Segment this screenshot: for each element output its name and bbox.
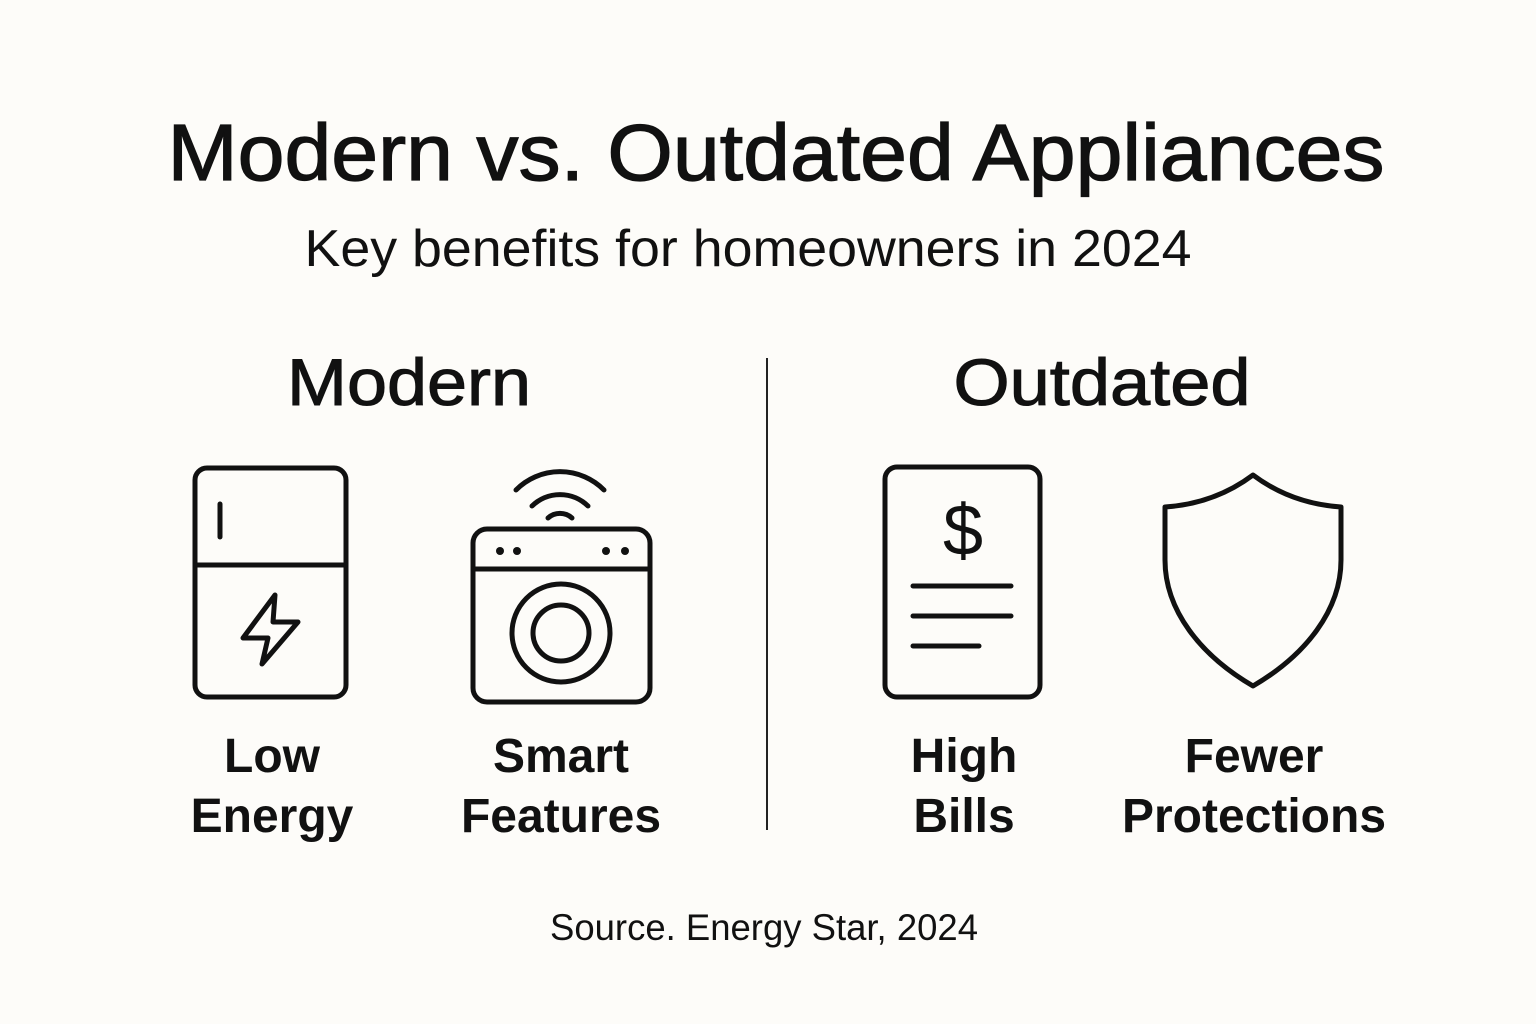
label: Smart Features: Features <box>461 790 661 843</box>
label: Low Energy: Low <box>224 730 321 783</box>
label: Smart Features: Smart <box>493 730 629 783</box>
label: Fewer Protections <box>1122 730 1386 843</box>
icon: smart washer <box>473 472 650 702</box>
label: High Bills: High <box>911 730 1017 783</box>
icon: bill: $ <box>943 491 983 571</box>
icon: fridge with lightning <box>195 468 346 697</box>
label: Low Energy <box>191 730 354 843</box>
label: Smart Features <box>461 730 661 843</box>
title: Modern vs. Outdated Appliances <box>168 108 1384 197</box>
icon: shield <box>1165 475 1341 686</box>
icon: bill <box>885 467 1040 697</box>
label: Low Energy: Energy <box>191 790 354 843</box>
label: High Bills <box>911 730 1017 843</box>
label: Fewer Protections: Protections <box>1122 790 1386 843</box>
subtitle: Key benefits for homeowners in 2024 <box>304 220 1192 278</box>
heading: Outdated: Outdated <box>954 345 1250 419</box>
label: High Bills: Bills <box>913 790 1015 843</box>
source note: Source. Energy Star, 2024 <box>550 907 978 948</box>
label: Fewer Protections: Fewer <box>1185 730 1323 783</box>
heading: Modern: Modern <box>287 345 531 419</box>
